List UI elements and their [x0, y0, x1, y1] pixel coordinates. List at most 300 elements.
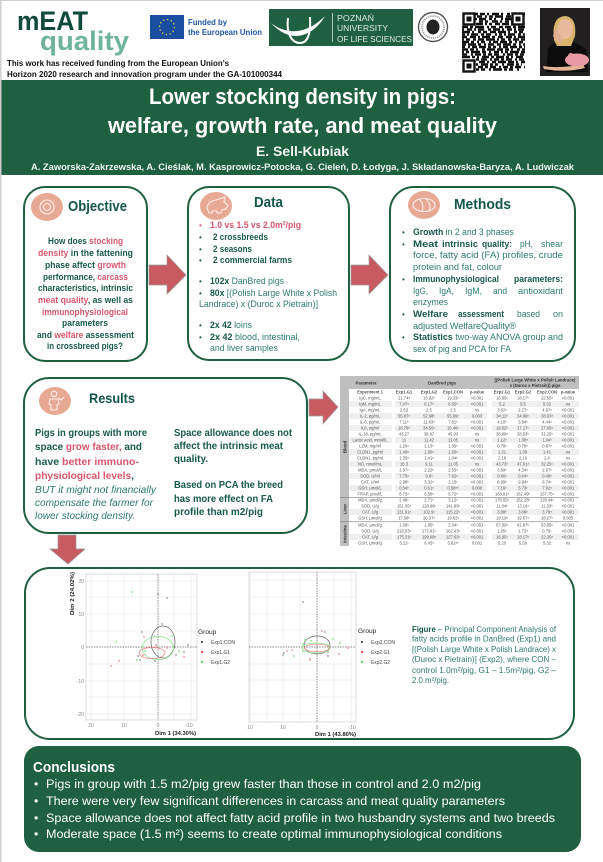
conclusions list: Pigs in group with 1.5 m2/pig grew faster than those in control and 2.0 m2/pig [46, 777, 481, 791]
table: immune and antioxidant parameters by group: 178.55ᵃ [495, 498, 509, 502]
table: immune and antioxidant parameters by group: LZM, mg/ml [359, 444, 381, 448]
table: immune and antioxidant parameters by group: 1.41ᵃ [424, 456, 434, 460]
methods list: Growth in 2 and 3 phases [413, 226, 514, 237]
objective question text: parameters [62, 318, 108, 329]
table: immune and antioxidant parameters by group: 34.08ᵇ [517, 414, 529, 418]
table: immune and antioxidant parameters by group: 34.55ᵃ [423, 426, 435, 430]
data list: • [199, 321, 202, 330]
table: immune and antioxidant parameters by group: <0.001 [562, 522, 575, 528]
table: immune and antioxidant parameters by group: 5.32 [543, 402, 552, 406]
chart: PCA Exp1: 0 [81, 645, 84, 651]
methods list: force, fatty acid (FA) profiles, crude [413, 249, 563, 260]
table: immune and antioxidant parameters by group: 141.89ᵇ [446, 504, 460, 508]
table: immune and antioxidant parameters by group: 6.45ᵃ [424, 540, 434, 546]
results right column: has more effect on FA [174, 494, 273, 505]
table: immune and antioxidant parameters by group: MDA, µmol/g [358, 498, 383, 502]
objective question text: meat quality, as well as [38, 295, 133, 306]
table: immune and antioxidant parameters by group: 38.97 [424, 432, 435, 436]
table: immune and antioxidant parameters by group: 18.3 [400, 462, 409, 466]
table: immune and antioxidant parameters by group: 19.19ᵃ [496, 516, 508, 520]
table: immune and antioxidant parameters by group: IgG, mg/mL [359, 396, 381, 400]
data list: Landrace) x (Duroc x Pietrain)] [199, 298, 318, 309]
table: immune and antioxidant parameters by group: 19.67ᵃ [517, 516, 529, 520]
table: immune and antioxidant parameters by group: 55.87ᵃ [398, 414, 410, 418]
icon: target [31, 193, 63, 221]
table: immune and antioxidant parameters by group: SOD, U/g [361, 504, 379, 508]
legend: Exp2 groups [358, 628, 395, 666]
table: immune and antioxidant parameters by group: 52.68ᵇ [423, 414, 435, 418]
table: immune and antioxidant parameters by group: 2.49ᶜ [399, 498, 409, 502]
table: immune and antioxidant parameters by group: IgA, mg/mL [360, 408, 381, 412]
table: immune and antioxidant parameters by group: 15.48ᶜ [447, 426, 459, 430]
table: immune and antioxidant parameters by group: 127.63ᶜ [446, 534, 461, 540]
chart: PCA Exp1: 10 [78, 612, 84, 618]
chart: PCA Exp2: 0 [316, 725, 319, 731]
conclusions list: • [34, 777, 38, 791]
table: immune and antioxidant parameters by group: 6.65ᵇ [448, 402, 458, 406]
table: immune and antioxidant parameters by group: 19.62ᵃ [447, 516, 459, 520]
table: immune and antioxidant parameters by group: 11.05 [448, 438, 459, 442]
table: immune and antioxidant parameters by group: ns [566, 450, 570, 454]
table: immune and antioxidant parameters by group: 1.65ᵇ [497, 528, 507, 534]
table: immune and antioxidant parameters by group: 45.03 [448, 432, 459, 436]
table: immune and antioxidant parameters by group: 38.03ᵃ [541, 414, 553, 418]
table: immune and antioxidant parameters by group: <0.001 [562, 432, 575, 436]
table: immune and antioxidant parameters by group: <0.001 [562, 462, 575, 466]
table: immune and antioxidant parameters by group: 9.56ᵃ [424, 492, 434, 496]
table: immune and antioxidant parameters by group: 2.27ᶜ [518, 408, 528, 412]
table: immune and antioxidant parameters by group: <0.001 [562, 528, 575, 534]
table: immune and antioxidant parameters by group: 0.005 [563, 516, 574, 520]
table: immune and antioxidant parameters by group: MDA, µmol/L [358, 468, 383, 472]
table: immune and antioxidant parameters by group: 102.9ᶜ [423, 510, 435, 514]
table: immune and antioxidant parameters by group: 1.04ᵇ [542, 438, 552, 442]
table: immune and antioxidant parameters by group: 2.5 [450, 408, 457, 412]
table: immune and antioxidant parameters by group: 2.04ᵃ [448, 522, 458, 528]
logo: Poznan University of Life Sciences: UNIVERSITY [337, 23, 388, 33]
chart: PCA Exp2: -10 [348, 725, 356, 731]
table: immune and antioxidant parameters by group: 1.13ᵇ [424, 444, 434, 448]
table: immune and antioxidant parameters by group: 5.32 [543, 540, 552, 546]
table: immune and antioxidant parameters by group: <0.001 [562, 408, 575, 412]
title: Lower stocking density in pigs: [149, 84, 456, 109]
table: immune and antioxidant parameters by group: 218.53ᵃ [397, 528, 411, 534]
table: immune and antioxidant parameters by group: 151.05ᵃ [397, 504, 411, 508]
table: immune and antioxidant parameters by group: p-value [561, 390, 576, 394]
logo: Poznan University of Life Sciences: POZNAŃ [337, 13, 374, 23]
table: immune and antioxidant parameters by group: Experiment 1 [357, 390, 384, 394]
chart: PCA Exp1: Dim 2 (24.02%) [70, 572, 76, 615]
chart: PCA Exp2 [247, 572, 395, 738]
table: immune and antioxidant parameters by group: 9.11 [425, 462, 434, 466]
table: immune and antioxidant parameters by group: CLDN1, pg/ml [357, 450, 383, 454]
table: immune and antioxidant parameters by group: IL8, ng/ml [361, 426, 379, 430]
table: immune and antioxidant parameters by group: <0.001 [562, 534, 575, 540]
table: immune and antioxidant parameters by group: ns [475, 462, 479, 466]
table: immune and antioxidant parameters by group: 28.53ᵇ [517, 432, 529, 436]
table: immune and antioxidant parameters by group: 0.54ᵇ [399, 486, 409, 490]
data list: 2 crossbreeds [213, 232, 268, 243]
data list: 1.0 vs 1.5 vs 2.0m²/pig [210, 219, 301, 230]
table: immune and antioxidant parameters by group: 11 [402, 438, 407, 442]
methods list: IgM, [465, 285, 482, 296]
table: immune and antioxidant parameters by group: 43.73ᵇ [496, 462, 508, 466]
table: immune and antioxidant parameters by group: <0.001 [471, 528, 484, 534]
table: immune and antioxidant parameters by group: 0.78ᵇ [497, 444, 507, 448]
figure caption: [(Polish Large White x Polish Landrace) x [412, 644, 557, 654]
table: immune and antioxidant parameters by group: <0.001 [562, 444, 575, 448]
conclusions list: • [34, 794, 38, 808]
table: immune and antioxidant parameters by group: 0.61ᵃ [424, 486, 434, 490]
heading: methods: Methods [454, 196, 511, 213]
figure caption: fatty acids profile in DanBred (Exp1) and [412, 634, 556, 644]
table: immune and antioxidant parameters by group: Exp1.CON [443, 390, 463, 394]
table: immune and antioxidant parameters by group: 5.11ᶜ [399, 540, 409, 546]
table: immune and antioxidant parameters by group: 6.17ᵇ [424, 402, 434, 406]
legend: Exp2 groups: Exp2.G2 [371, 660, 390, 666]
table: immune and antioxidant parameters by group: 2.97ᶜ [542, 468, 552, 472]
table: immune and antioxidant parameters by group: 1.04ᵇ [448, 456, 458, 460]
table: immune and antioxidant parameters by group: 22.55ᵃ [541, 396, 553, 400]
table: immune and antioxidant parameters by group: 5.2 [499, 402, 506, 406]
table: immune and antioxidant parameters by group: 2.15ᶜ [448, 480, 458, 484]
panel: methods [390, 187, 575, 361]
table: immune and antioxidant parameters by group: 128.44ᶜ [540, 498, 555, 502]
table: immune and antioxidant parameters by group: 43.27 [399, 432, 410, 436]
table: immune and antioxidant parameters by group: 7.47ᵃ [399, 402, 409, 406]
icon: person with check [39, 387, 71, 415]
table: immune and antioxidant parameters by group: 199.08ᵃ [422, 534, 436, 540]
panel: results [24, 378, 307, 533]
methods list: Statistics two-way ANOVA group and [413, 331, 563, 342]
table: immune and antioxidant parameters by group: 3.06ᵇ [518, 510, 528, 514]
table: immune and antioxidant parameters by group: 1.12ᵇ [497, 438, 507, 442]
table: immune and antioxidant parameters by group: 0.76ᵇ [518, 444, 528, 448]
table: immune and antioxidant parameters by group: 47.01ᵃ [517, 462, 529, 466]
table: immune and antioxidant parameters by group: MDA, µmol/g [358, 522, 383, 528]
table: immune and antioxidant parameters by group: 0.49ᵇ [542, 474, 552, 478]
chart: PCA Exp1: 10 [121, 723, 127, 729]
table: immune and antioxidant parameters by group: 5.50 [519, 540, 528, 546]
methods list: pH, [520, 238, 533, 249]
table: immune and antioxidant parameters by group: <0.001 [471, 516, 484, 520]
table: immune and antioxidant parameters by group: 11.03ᵇ [541, 504, 553, 508]
table: immune and antioxidant parameters by group: 0.008 [472, 486, 483, 490]
table: immune and antioxidant parameters by group: <0.001 [471, 456, 484, 460]
chart: PCA Exp1 [70, 572, 235, 737]
panel: objective [24, 187, 147, 361]
data list: 2x 42 loins [210, 319, 252, 330]
methods list [402, 226, 563, 354]
heading: objective: Objective [68, 198, 127, 215]
table: immune and antioxidant parameters by group: [(Polish Large White x Polish Landrace) [495, 378, 576, 382]
conclusions list: Space allowance does not affect fatty acid profile in two husbandry systems and two breeds [46, 811, 555, 825]
table: immune and antioxidant parameters by group: 2.5 [426, 408, 433, 412]
table: immune and antioxidant parameters by group [340, 376, 579, 546]
figure caption: 2.0 m²/pig. [412, 675, 449, 685]
table: immune and antioxidant parameters by group: 20.37ᵃ [423, 516, 435, 520]
results left column: Pigs in groups with more [35, 428, 147, 439]
objective question text: and welfare assessment [37, 330, 135, 341]
results right column: affect the intrinsic meat [174, 441, 284, 452]
table: immune and antioxidant parameters by group: 4.34ᵃ [518, 468, 528, 472]
table: immune and antioxidant parameters by group: 2.55ᵃ [448, 468, 458, 472]
logo: mEAT quality: quality [40, 26, 129, 56]
table: immune and antioxidant parameters by group: 157.75ᶜ [540, 492, 555, 496]
table: immune and antioxidant parameters by group: 7.82ᵃ [448, 474, 458, 478]
table: immune and antioxidant parameters by group: SOD, U/ml [360, 474, 380, 478]
co-authors: A. Zaworska-Zakrzewska, A. Cieślak, M. Kasprowicz-Potocka, G. Cieleń, D. Łodyga, J. Składanowska-Baryza, A. Ludwiczak [31, 161, 575, 172]
data list: 102x DanBred pigs [210, 275, 284, 286]
table: immune and antioxidant parameters by group: 3.12ᵃ [448, 498, 458, 502]
table: immune and antioxidant parameters by group: 0.75ᶜ [542, 528, 552, 534]
table: immune and antioxidant parameters by group: 4.44ᵃ [542, 420, 552, 424]
table: immune and antioxidant parameters by group: 5.81ᵃᵇ [447, 540, 459, 546]
table: immune and antioxidant parameters by group: 5.5 [520, 402, 527, 406]
data list: and liver samples [210, 342, 278, 353]
table: immune and antioxidant parameters by group: 55.99ᵃ [447, 414, 459, 418]
results right column: Space allowance does not [174, 428, 292, 439]
arrow: data to methods [351, 255, 388, 294]
objective question text: phase affect growth [45, 260, 126, 271]
table: immune and antioxidant parameters by group: 61.87ᵇ [517, 522, 529, 528]
table: immune and antioxidant parameters by group: 0.64ᵃ [518, 474, 528, 478]
logo: university seal [418, 12, 448, 42]
logo: EU flag, funded by: the European Union [188, 28, 262, 37]
conclusions list: Moderate space (1.5 m²) seems to create optimal immunophysiological conditions [46, 827, 502, 841]
legend: Exp1 groups [198, 629, 235, 666]
methods list: antioxidant [518, 285, 563, 296]
data list: • [199, 277, 202, 286]
data list: 80x [(Polish Large White x Polish [210, 287, 337, 298]
table: immune and antioxidant parameters by group: 21.74ᵃ [398, 396, 410, 400]
table: immune and antioxidant parameters by group: 7.16ᵇ [497, 486, 507, 490]
table: immune and antioxidant parameters by group: 7.92ᵃ [542, 486, 552, 490]
table: immune and antioxidant parameters by group: <0.001 [562, 486, 575, 490]
methods list: IgA, [439, 285, 454, 296]
table: immune and antioxidant parameters by group: 11.05 [448, 462, 459, 466]
methods list: adjusted WelfareQuality® [413, 320, 516, 331]
table: immune and antioxidant parameters by group: <0.001 [562, 510, 575, 514]
table: immune and antioxidant parameters by group: Exp1.G2 [421, 390, 438, 394]
table: immune and antioxidant parameters by group: p-value [470, 390, 485, 394]
table: immune and antioxidant parameters by group: 0.003 [472, 414, 483, 418]
table: immune and antioxidant parameters by group: <0.001 [471, 450, 484, 454]
table: immune and antioxidant parameters by group: 2.18 [498, 456, 507, 460]
table: immune and antioxidant parameters by group: 1.97ᶜ [399, 468, 409, 472]
table: immune and antioxidant parameters by group: 1.38ᵃ [518, 438, 528, 442]
table: immune and antioxidant parameters by group: 1.39 [519, 450, 528, 454]
methods list: parameters: [514, 274, 563, 285]
table: immune and antioxidant parameters by group: <0.001 [562, 480, 575, 484]
chart: PCA Exp2: Dim 1 (43.80%) [315, 732, 356, 738]
data list: 2 seasons [213, 244, 252, 255]
table: immune and antioxidant parameters by group: CAT, U/g [362, 510, 379, 514]
conclusions list: • [34, 827, 38, 841]
table: immune and antioxidant parameters by group: <0.001 [471, 474, 484, 478]
table: immune and antioxidant parameters by group: 3.62ᵇ [497, 408, 507, 412]
conclusions list: • [34, 811, 38, 825]
figure caption: (Duroc x Pietrain)] (Exp2), where CON – [412, 654, 556, 664]
logo: Poznan University of Life Sciences [269, 9, 413, 46]
panel: PCA figure [25, 568, 574, 739]
title: welfare, growth rate, and meat quality [107, 113, 497, 138]
table: immune and antioxidant parameters by group: Lactic acid, mmol/L [352, 438, 388, 442]
table: immune and antioxidant parameters by group: <0.001 [471, 492, 484, 496]
table: immune and antioxidant parameters by group: 2.98ᵇ [399, 480, 409, 484]
table: immune and antioxidant parameters by group: 2.71ᵇ [424, 498, 434, 502]
table: immune and antioxidant parameters by group: 5.72ᵇ [448, 492, 458, 496]
table: immune and antioxidant parameters by group: <0.001 [562, 474, 575, 478]
table: immune and antioxidant parameters by group: <0.001 [471, 396, 484, 400]
methods list: shear [541, 238, 563, 249]
table: immune and antioxidant parameters by group: 115.22ᵇ [446, 510, 460, 514]
chart: PCA Exp1: -10 [185, 723, 193, 729]
table: immune and antioxidant parameters by group: 175.31ᵇ [397, 534, 411, 540]
table: immune and antioxidant parameters by group: FRAP, µmol/L [357, 492, 383, 496]
heading: conclusions: Conclusions [33, 760, 115, 776]
conclusions list: There were very few significant differences in carcass and meat quality parameters [46, 794, 505, 808]
methods list: on [553, 308, 563, 319]
methods list: Meat [413, 239, 439, 250]
conclusions list [34, 777, 555, 841]
table: immune and antioxidant parameters by group: ns [475, 408, 479, 412]
results left column [35, 428, 157, 522]
table: immune and antioxidant parameters by group: <0.001 [471, 510, 484, 514]
table: immune and antioxidant parameters by group: 3.79ᵃ [542, 510, 552, 514]
table: immune and antioxidant parameters by group: 2.53 [400, 408, 409, 412]
table: immune and antioxidant parameters by group: 1.72ᵃ [518, 528, 528, 534]
table: immune and antioxidant parameters by group: 1.68ᵇ [399, 522, 409, 528]
table: immune and antioxidant parameters by group: <0.001 [471, 420, 484, 424]
methods list: • [402, 275, 405, 284]
methods list: quality: [482, 239, 512, 250]
table: immune and antioxidant parameters by group: IgM, mg/mL [359, 402, 382, 406]
table: immune and antioxidant parameters by group: 2.4 [544, 456, 551, 460]
table: immune and antioxidant parameters by group: 38.08ᵃ [496, 432, 508, 436]
icon: meat [408, 191, 440, 219]
title [107, 84, 497, 138]
objective question text: in crossbreed pigs? [47, 341, 123, 352]
legend: Exp2 groups: Exp2.CON [371, 640, 395, 646]
table: immune and antioxidant parameters by group: 2.22ᵇ [424, 468, 434, 472]
logo: mEAT quality [17, 6, 129, 56]
objective question text [37, 236, 135, 352]
table: immune and antioxidant parameters by group: 4.10ᵇ [497, 420, 507, 424]
funding statement: This work has received funding from the European Union’s [7, 58, 229, 68]
methods list: • [402, 228, 405, 237]
data list: • [199, 256, 202, 265]
methods list: based [517, 308, 540, 319]
table: immune and antioxidant parameters by group: 1.35ᵃ [399, 456, 409, 460]
table: immune and antioxidant parameters by group: 2.19 [519, 456, 528, 460]
arrow: objective to data [149, 255, 186, 294]
table: immune and antioxidant parameters by group: 3.32ᵃ [424, 480, 434, 484]
methods list: and [493, 285, 507, 296]
arrow: results to table [309, 391, 338, 424]
table: immune and antioxidant parameters by group: 8.75ᵃ [399, 492, 409, 496]
table: immune and antioxidant parameters by group: 7.81ᵇ [448, 420, 458, 424]
table: immune and antioxidant parameters by group: 16.95ᶜ [496, 534, 508, 540]
table: immune and antioxidant parameters by group: 0.66ᵃ [497, 474, 507, 478]
chart: PCA Exp2: 10 [247, 725, 253, 731]
table: immune and antioxidant parameters by group: 128.98ᶜ [422, 504, 437, 508]
logo: EU flag, funded by: Funded by [188, 18, 228, 27]
table: immune and antioxidant parameters by group: 32.25ᶜ [541, 462, 553, 466]
table: immune and antioxidant parameters by group: 17.17ᶜ [517, 426, 529, 430]
table: immune and antioxidant parameters by group: GSH, µmol/g [358, 540, 382, 546]
table: immune and antioxidant parameters by group: <0.001 [471, 504, 484, 508]
table: immune and antioxidant parameters by group: 162.49ᵇ [516, 492, 530, 496]
table: immune and antioxidant parameters by group: 18.27ᵇ [541, 516, 553, 520]
table: immune and antioxidant parameters by group: CAT, U/ml [361, 480, 379, 484]
table: immune and antioxidant parameters by group: 131.01ᵃ [397, 510, 411, 514]
logo: Poznan University of Life Sciences: OF LIFE SCIENCES [337, 34, 412, 44]
table: immune and antioxidant parameters by group: <0.001 [471, 444, 484, 448]
table: immune and antioxidant parameters by group: 0.58ᵃᵇ [447, 486, 459, 490]
table: immune and antioxidant parameters by group: <0.001 [562, 492, 575, 496]
chart: PCA Exp1: -10 [77, 679, 84, 685]
results right column: profile than m2/pig [174, 507, 263, 518]
table: immune and antioxidant parameters by group: 4.97ᵃ [542, 408, 552, 412]
legend: Exp2 groups: Group [358, 628, 377, 635]
photo: researcher holding toy pig [540, 8, 590, 76]
panel: data [188, 187, 349, 360]
results left column: physiological levels, [35, 471, 134, 482]
funding statement: Horizon 2020 research and innovation program under the GA-101000344 [7, 69, 282, 79]
results left column: lower stocking density. [35, 511, 135, 522]
objective question text: density in the fattening [38, 248, 133, 259]
chart: PCA Exp1: -20 [77, 712, 84, 718]
heading: data: Data [254, 194, 284, 211]
table: immune and antioxidant parameters by group: Intestine [342, 525, 348, 543]
logo: mEAT quality: mEAT [17, 6, 88, 36]
objective question text: performance, carcass [43, 272, 128, 283]
table: immune and antioxidant parameters by group: Exp1.G1 [396, 390, 413, 394]
table: immune and antioxidant parameters by group: 11.04ᵇ [496, 504, 508, 508]
table: immune and antioxidant parameters by group: 8.99ᵇ [497, 480, 507, 484]
table: immune and antioxidant parameters by group: ns [566, 402, 570, 406]
table: immune and antioxidant parameters by group: 31.25ᵇ [541, 432, 553, 436]
table: immune and antioxidant parameters by group: NO, nmol/mL [358, 462, 383, 466]
results left column: compensate the farmer for [35, 498, 154, 509]
table: immune and antioxidant parameters by group: 13.16ᵃ [517, 504, 529, 508]
table: immune and antioxidant parameters by group: x (Duroc x Pietrain)] pigs [510, 383, 561, 388]
legend: Exp1 groups: Exp1.G2 [211, 660, 230, 666]
table: immune and antioxidant parameters by group: 7.75ᵃ [399, 474, 409, 478]
table: immune and antioxidant parameters by group: 1.05ᵇ [448, 444, 458, 448]
table: immune and antioxidant parameters by group: 6.74ᶜ [542, 480, 552, 484]
table: immune and antioxidant parameters by group: Exp2.G1 [494, 390, 511, 394]
results right column: Based on PCA the breed [174, 480, 283, 491]
table: immune and antioxidant parameters by group: 67.99ᵃ [496, 522, 508, 528]
heading: results: Results [89, 390, 135, 406]
table: immune and antioxidant parameters by group: Blood [342, 441, 348, 453]
table: immune and antioxidant parameters by group: 1.85ᵇ [424, 522, 434, 528]
table: immune and antioxidant parameters by group: ns [566, 456, 570, 460]
chart: PCA Exp1: 20 [88, 723, 94, 729]
data list: 2 commercial farms [213, 255, 292, 266]
results left column: BUT it might not financially [35, 485, 157, 496]
table: immune and antioxidant parameters by group: Parameter [355, 380, 377, 386]
data list: • [199, 233, 202, 242]
methods list: assessment [458, 309, 505, 320]
table: immune and antioxidant parameters by group: <0.001 [471, 498, 484, 502]
methods list: intrinsic [442, 239, 479, 250]
table: immune and antioxidant parameters by group: DanBred pigs [428, 380, 457, 386]
table: immune and antioxidant parameters by group: ns [475, 432, 479, 436]
table: immune and antioxidant parameters by group: CLDN1, pg/ml [357, 456, 383, 460]
